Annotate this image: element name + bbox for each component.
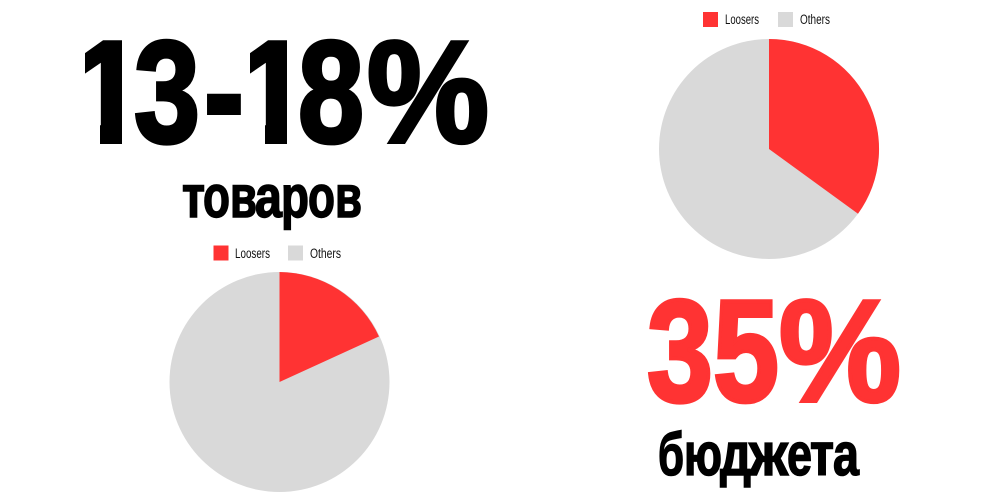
pie chart: top right, budget <box>659 12 879 259</box>
headline: 13-18%: % <box>367 11 489 173</box>
subheading: бюджета: д <box>720 421 751 488</box>
headline: 35% <box>647 270 901 432</box>
headline: 35%: 5 <box>713 270 779 432</box>
subheading: бюджета: т <box>810 421 834 488</box>
headline: 35%: % <box>779 270 901 432</box>
legend: top pie <box>703 12 830 27</box>
subheading: бюджета: а <box>833 421 859 488</box>
subheading: товаров: в <box>230 164 257 230</box>
subheading: бюджета: б <box>658 421 684 488</box>
headline: 13-18%: 1 <box>237 11 310 173</box>
legend: top pie: Others <box>800 12 830 27</box>
headline: 13-18%: 1 <box>72 11 145 173</box>
subheading: товаров: в <box>335 164 362 230</box>
headline: 13-18% <box>85 38 488 146</box>
legend: bottom pie <box>214 246 341 261</box>
legend: bottom pie: Others <box>310 246 341 261</box>
legend: top pie: Loosers <box>725 12 759 27</box>
headline: 35%: 3 <box>647 270 713 432</box>
subheading: бюджета <box>658 421 859 488</box>
pie chart: bottom left, goods <box>170 246 390 492</box>
subheading: товаров: о <box>203 164 230 230</box>
subheading: бюджета: ж <box>748 421 789 488</box>
subheading: товаров: о <box>308 164 335 230</box>
subheading: бюджета: е <box>787 421 812 488</box>
headline: 13-18%: 8 <box>298 11 364 173</box>
subheading: товаров <box>182 164 362 230</box>
headline: 13-18%: 3 <box>134 11 200 173</box>
subheading: бюджета: ю <box>684 421 722 488</box>
subheading: товаров: т <box>182 164 205 230</box>
legend: bottom pie: Loosers <box>235 246 270 261</box>
headline: 13-18%: - <box>204 11 244 173</box>
subheading: товаров: р <box>281 164 309 230</box>
subheading: товаров: а <box>255 164 283 230</box>
